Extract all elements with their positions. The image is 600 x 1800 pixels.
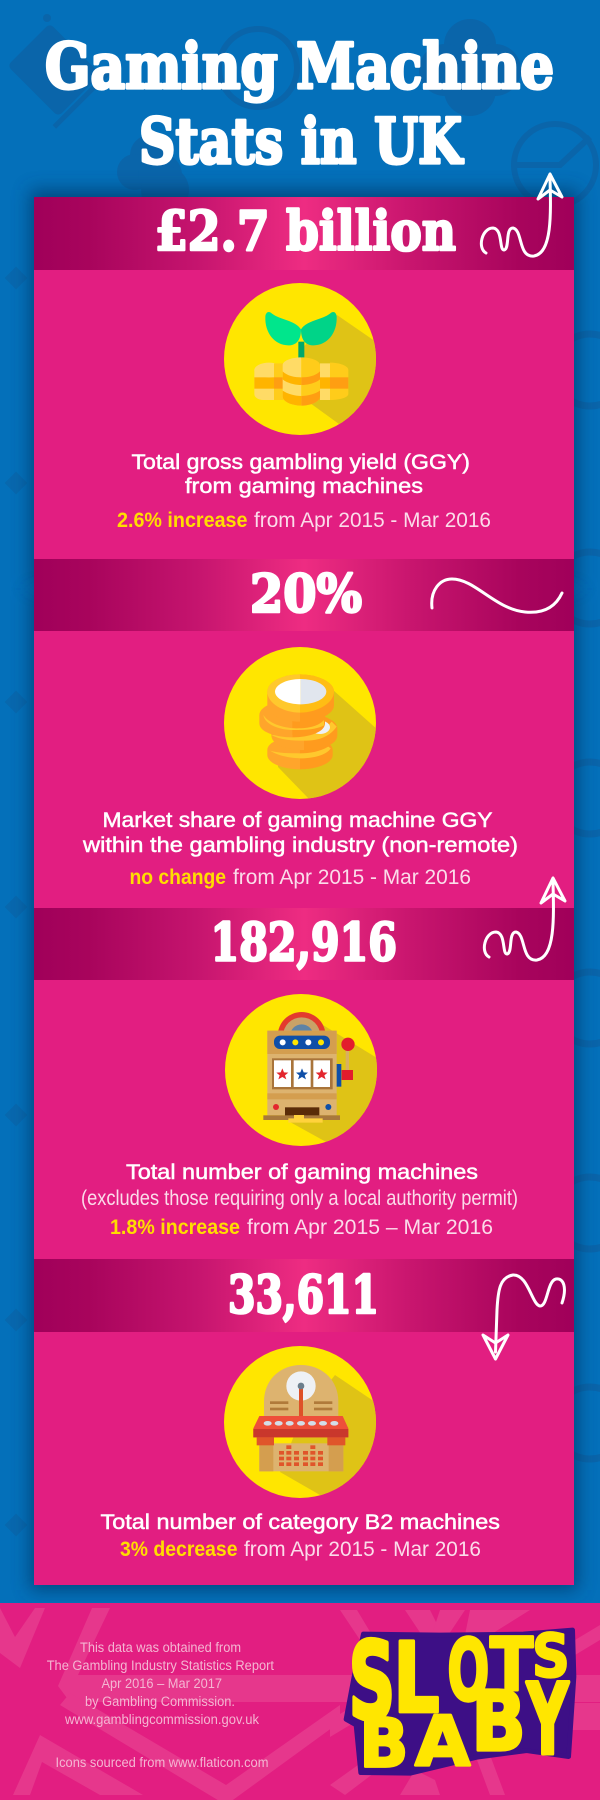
arrow: downward squiggle, category B2 [483, 1275, 564, 1359]
footer background pattern [0, 1608, 600, 1800]
panel: total gaming machines [34, 908, 574, 1239]
banner: 182,916: 182,916 [210, 912, 397, 974]
logo: Slots Baby: A [415, 1702, 470, 1782]
arrow: upward squiggle, gaming machines [484, 878, 565, 960]
footer credit text: Apr 2016 – Mar 2017 [102, 1676, 222, 1691]
footer credit text [47, 1640, 274, 1770]
text: total gross gambling yield [117, 450, 491, 532]
title [45, 29, 554, 178]
banner: 33,611 [34, 1259, 574, 1332]
logo: Slots Baby: S [532, 1623, 570, 1692]
title: Stats in UK [139, 104, 464, 178]
text: total gross gambling yield: from gaming machines [185, 474, 423, 498]
text: total number of gaming machines: (excludes those requiring only a local authority permit) [81, 1186, 518, 1210]
panel: statistics card [34, 197, 574, 1585]
logo: Slots Baby: S [349, 1619, 395, 1744]
text: total number of category B2 machines: from Apr 2015 - Mar 2016 [244, 1537, 481, 1561]
banner: 20% [34, 559, 574, 631]
text: total number of gaming machines [81, 1160, 518, 1239]
logo: Slots Baby: B [471, 1675, 526, 1770]
footer credit text: The Gambling Industry Statistics Report [47, 1658, 274, 1673]
banner: 182,916 [34, 908, 574, 980]
banner: 33,611: 33,611 [228, 1265, 379, 1326]
arrow: flat wave, market share [432, 579, 562, 612]
logo: Slots Baby: L [393, 1624, 439, 1735]
arrow: upward squiggle, gross yield [481, 174, 562, 256]
logo: Slots Baby: B [359, 1706, 408, 1783]
text: market share of gaming machine GGY [82, 808, 518, 889]
icon: seedling growing from coins [224, 283, 376, 435]
banner: £2.7 billion: £2.7 billion [155, 199, 456, 263]
text: total gross gambling yield: 2.6% increase [117, 508, 248, 532]
text: total gross gambling yield: from Apr 2015 - Mar 2016 [254, 508, 491, 532]
panel: category B2 machines [34, 1259, 574, 1561]
text: total gross gambling yield: Total gross gambling yield (GGY) [132, 450, 470, 474]
text: total number of category B2 machines [100, 1510, 500, 1561]
footer credit text: This data was obtained from [80, 1640, 241, 1655]
panel: gross gambling yield [34, 197, 574, 532]
panel: footer [0, 1603, 600, 1800]
text: market share of gaming machine GGY: Market share of gaming machine GGY [102, 808, 493, 832]
icon: slot machine [225, 994, 377, 1146]
banner: 20%: 20% [250, 564, 362, 625]
banner: £2.7 billion [34, 197, 574, 270]
text: market share of gaming machine GGY: from Apr 2015 - Mar 2016 [233, 865, 471, 889]
text: market share of gaming machine GGY: within the gambling industry (non-remote) [82, 833, 518, 857]
logo: Slots Baby: Y [526, 1663, 570, 1778]
logo: Slots Baby [346, 1619, 574, 1783]
text: total number of gaming machines: from Apr 2015 – Mar 2016 [247, 1215, 493, 1239]
logo: Slots Baby: O [447, 1623, 489, 1721]
icon: fixed odds betting terminal [224, 1346, 376, 1498]
text: total number of gaming machines: Total number of gaming machines [126, 1160, 478, 1184]
footer credit text: by Gambling Commission. [85, 1694, 235, 1709]
text: market share of gaming machine GGY: no change [130, 865, 226, 889]
footer credit text: www.gamblingcommission.gov.uk [64, 1712, 259, 1727]
logo: Slots Baby: T [490, 1623, 533, 1708]
text: total number of category B2 machines: 3% decrease [120, 1537, 238, 1561]
icon: stack of coins [224, 647, 376, 799]
card shadow [30, 190, 578, 588]
text: total number of category B2 machines: Total number of category B2 machines [100, 1510, 500, 1534]
footer credit text: Icons sourced from www.flaticon.com [56, 1755, 268, 1770]
panel: market share [34, 559, 574, 889]
text: total number of gaming machines: 1.8% increase [110, 1215, 240, 1239]
